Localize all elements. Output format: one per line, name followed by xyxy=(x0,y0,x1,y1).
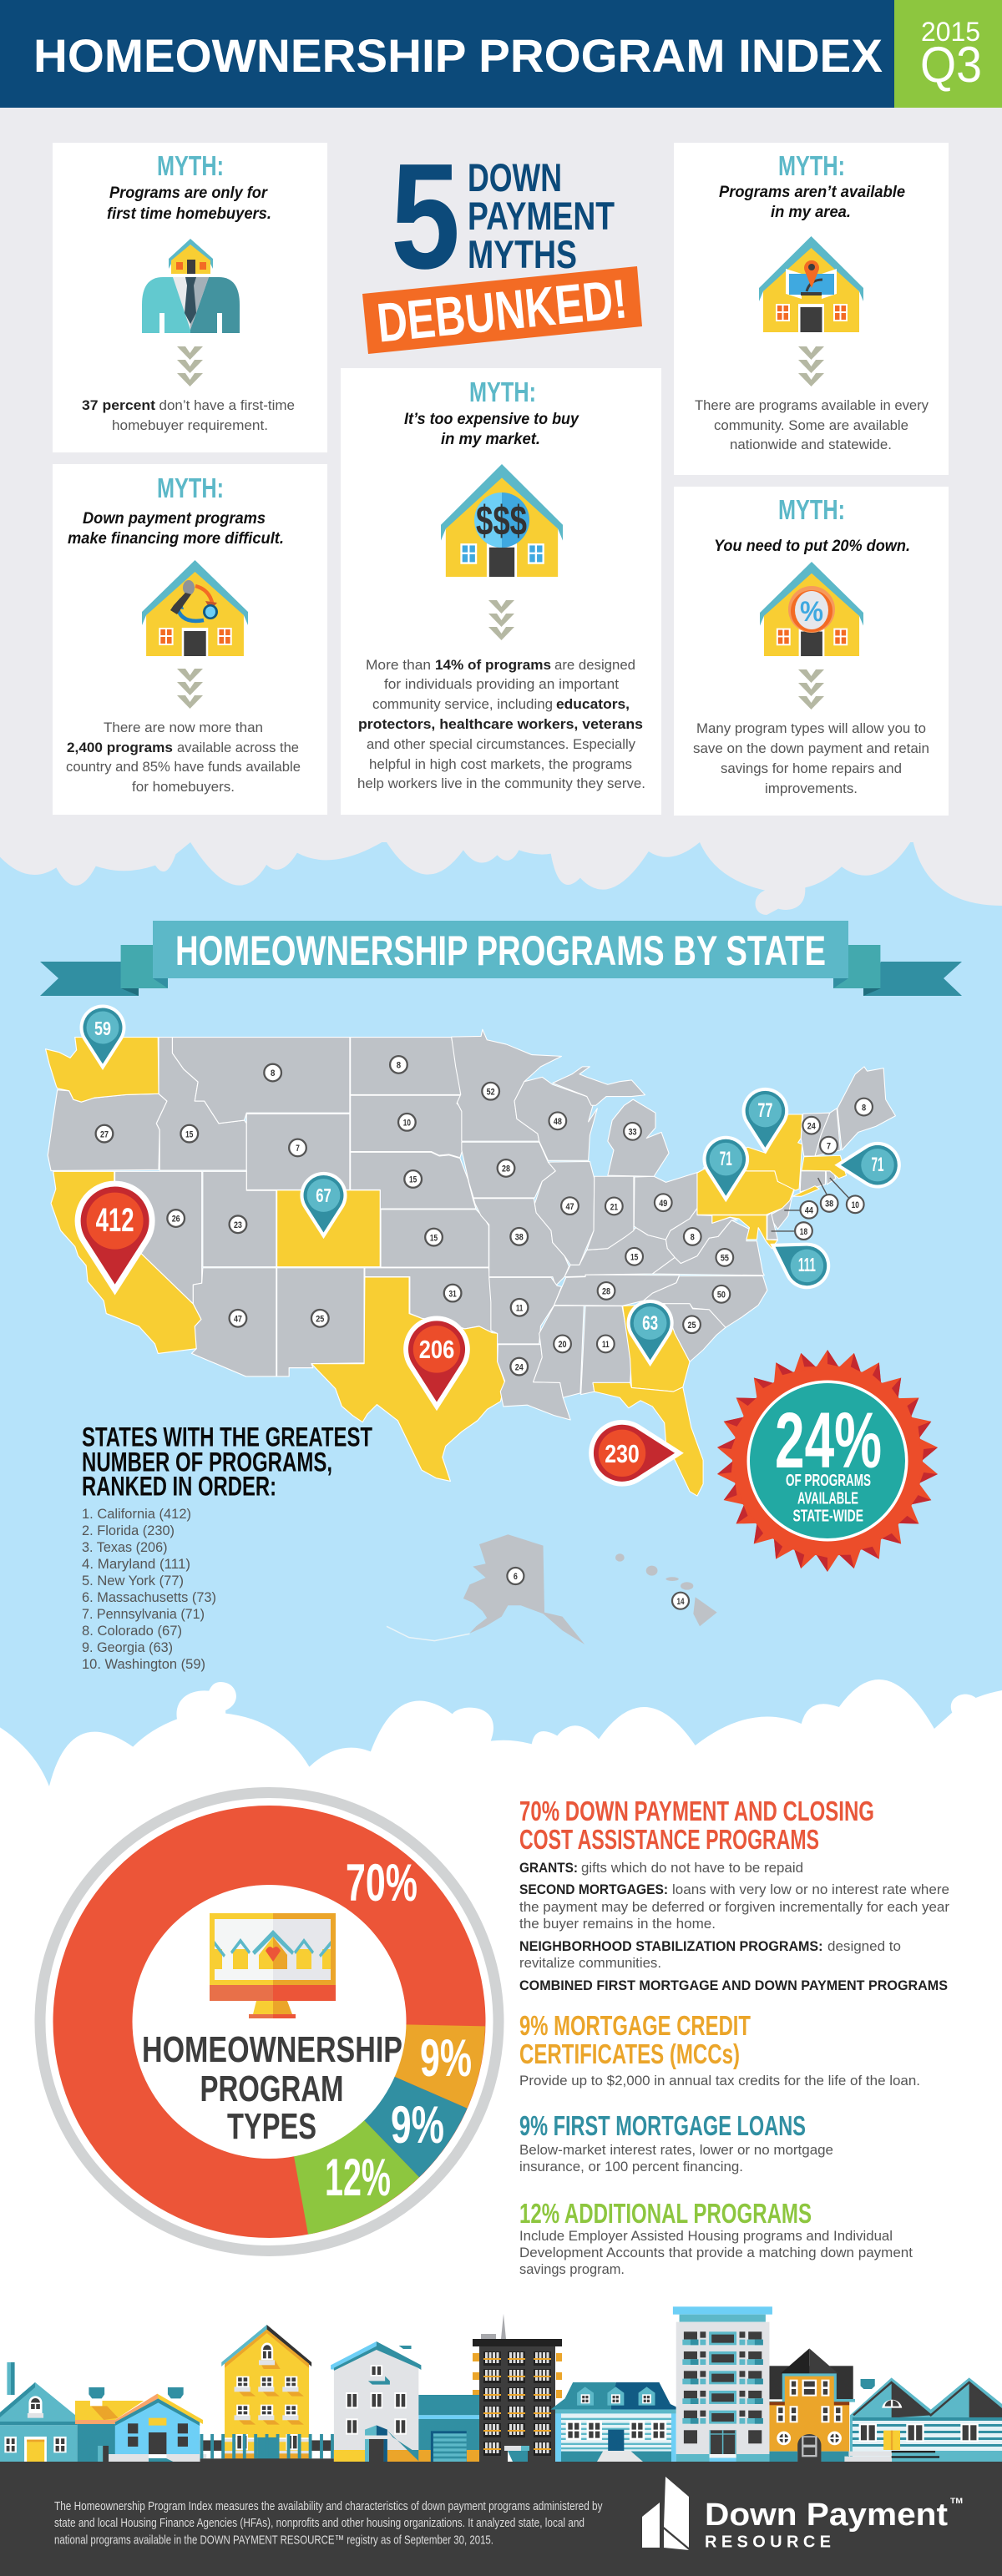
state count badge: Hawaii: 14 xyxy=(676,1597,685,1607)
state count badges west: 31 xyxy=(449,1289,457,1299)
segment: 9% mortgage credit xyxy=(394,2024,485,2109)
value labels: 9% xyxy=(391,2096,444,2154)
pin: Massachusetts 71 xyxy=(834,1142,901,1189)
map of United States xyxy=(46,1004,901,1644)
heading xyxy=(519,2010,751,2069)
state count badges east xyxy=(549,1099,873,1352)
pin: Florida 230: 230 xyxy=(605,1439,640,1468)
state count badges east: 8 xyxy=(691,1233,695,1243)
arrow: chevrons xyxy=(798,669,824,710)
heading words: DOWN xyxy=(468,155,562,200)
ranked states list: 8. Colorado (67) xyxy=(82,1623,182,1639)
panel: myth financing difficulty xyxy=(53,464,327,815)
arrow: chevrons xyxy=(177,669,203,709)
ranked states heading xyxy=(82,1422,372,1502)
program descriptions: revitalize communities. xyxy=(519,1955,661,1971)
donut center title: TYPES xyxy=(227,2106,316,2147)
myth heading: MYTH: xyxy=(157,150,224,181)
pin: Washington 59: 59 xyxy=(94,1018,111,1039)
myth statement xyxy=(68,510,284,548)
header band xyxy=(0,0,1002,108)
ranked states list: 9. Georgia (63) xyxy=(82,1639,173,1655)
state count badges east: 44 xyxy=(805,1206,813,1216)
myth answer xyxy=(693,720,929,796)
myth answer: don’t have a first-time xyxy=(159,397,295,413)
state count badges east: 8 xyxy=(862,1103,866,1113)
myth answer: Many program types will allow you to xyxy=(696,720,926,736)
ranked states list: 5. New York (77) xyxy=(82,1573,184,1589)
myth answer: There are now more than xyxy=(104,720,263,735)
heading: 5 down payment myths debunked xyxy=(362,133,642,354)
ranked states list: 3. Texas (206) xyxy=(82,1539,167,1555)
myth heading: MYTH: xyxy=(778,494,845,525)
myth answer xyxy=(66,720,301,795)
description: Below-market interest rates, lower or no mortgage xyxy=(519,2142,833,2158)
logo: Down Payment Resource: Down Payment xyxy=(705,2498,948,2533)
icon: monitor with houses xyxy=(210,1913,336,2018)
icon: house-headed person xyxy=(142,239,240,333)
ranked states list: 4. Maryland (111) xyxy=(82,1556,190,1572)
state count badges east: 18 xyxy=(800,1227,807,1237)
myth answer xyxy=(695,397,929,452)
houses, left part xyxy=(0,2325,482,2462)
myth answer: for individuals providing an important xyxy=(384,676,619,692)
pin: Texas 206 xyxy=(403,1316,470,1411)
blue map section background xyxy=(0,826,1002,1795)
panel: myth 20% down xyxy=(674,487,949,816)
description xyxy=(519,2228,913,2277)
state count badges west: 47 xyxy=(234,1315,242,1325)
white clouds xyxy=(0,1679,1002,1826)
pin: Colorado 67: 67 xyxy=(316,1184,331,1206)
myth answer: 2,400 programs xyxy=(67,740,173,755)
ranked states list: 1. California (412) xyxy=(82,1506,191,1522)
myth statement xyxy=(404,411,579,448)
pin: Georgia 63: 63 xyxy=(642,1312,658,1335)
icon: house with map xyxy=(759,236,863,332)
icon: house with dollar signs: $$$ xyxy=(476,498,527,544)
text block: 9% first mortgage loans xyxy=(519,2110,833,2174)
panel: myth first-time homebuyers xyxy=(53,143,327,452)
state count badges west: 23 xyxy=(234,1220,242,1230)
description: savings program. xyxy=(519,2261,625,2277)
state count badges east: 38 xyxy=(825,1200,833,1210)
myth answer: save on the down payment and retain xyxy=(693,740,929,756)
myth heading: MYTH: xyxy=(778,150,845,181)
pin: Pennsylvania 71 xyxy=(702,1136,749,1202)
callout number: 24% xyxy=(775,1397,882,1485)
myth answer: for homebuyers. xyxy=(132,779,235,795)
state count badges west: 11 xyxy=(516,1304,524,1314)
state count badges east: 33 xyxy=(628,1128,636,1138)
ranked states list: 10. Washington (59) xyxy=(82,1656,205,1672)
logo: Down Payment Resource xyxy=(642,2477,963,2552)
black tower xyxy=(473,2314,562,2462)
ranked states list: 2. Florida (230) xyxy=(82,1523,175,1538)
myth answer: country and 85% have funds available xyxy=(66,759,301,775)
myth answer: are designed xyxy=(554,657,635,673)
state count badges west: 8 xyxy=(397,1061,402,1071)
myth answer: community service, including xyxy=(372,696,553,712)
program descriptions: GRANTS: xyxy=(519,1860,578,1876)
state count badges west: 8 xyxy=(271,1068,276,1078)
pin: Colorado 67 xyxy=(300,1172,347,1239)
myth answer: There are programs available in every xyxy=(695,397,929,413)
myth answer xyxy=(82,397,295,433)
program descriptions: NEIGHBORHOOD STABILIZATION PROGRAMS: xyxy=(519,1938,823,1954)
date: year: 2015 xyxy=(921,17,980,47)
myth answer: protectors, healthcare workers, veterans xyxy=(358,716,643,732)
state count badges west: 52 xyxy=(487,1087,495,1097)
description: insurance, or 100 percent financing. xyxy=(519,2159,743,2174)
ranked states heading: STATES WITH THE GREATEST xyxy=(82,1422,372,1452)
state count badges west xyxy=(96,1056,528,1375)
state count badges west: 38 xyxy=(515,1233,524,1243)
methodology note: national programs available in the DOWN PAYMENT RESOURCE™ registry as of September 30, 2015. xyxy=(54,2533,493,2548)
state count badges west: 7 xyxy=(296,1144,300,1154)
program descriptions xyxy=(519,1860,949,1993)
value labels xyxy=(325,1854,472,2207)
program descriptions: loans with very low or no interest rate where xyxy=(672,1881,949,1897)
pin: Pennsylvania 71: 71 xyxy=(720,1148,732,1170)
methodology note: The Homeownership Program Index measures the availability and characteristics of down payment programs administered by xyxy=(54,2499,603,2513)
heading: 9% FIRST MORTGAGE LOANS xyxy=(519,2110,806,2141)
myth answer: helpful in high cost markets, the programs xyxy=(369,756,632,772)
date: quarter: Q3 xyxy=(920,37,982,93)
state count badges west: 15 xyxy=(185,1129,194,1139)
program descriptions: SECOND MORTGAGES: xyxy=(519,1881,668,1897)
state count badges west: 25 xyxy=(316,1315,325,1325)
heading: 12% ADDITIONAL PROGRAMS xyxy=(519,2198,812,2229)
state count badge: Alaska: 6 xyxy=(514,1572,518,1582)
state count badges east: 49 xyxy=(659,1199,667,1209)
program descriptions: COMBINED FIRST MORTGAGE AND DOWN PAYMENT PROGRAMS xyxy=(519,1977,948,1993)
state count badges east: 55 xyxy=(721,1254,729,1264)
program descriptions: the payment may be deferred or forgiven incrementally for each year xyxy=(519,1899,949,1915)
description: Development Accounts that provide a matching down payment xyxy=(519,2245,913,2260)
pin: California 412 xyxy=(75,1181,155,1296)
icon: house with percent badge xyxy=(760,562,863,656)
starburst callout: 24% state-wide xyxy=(716,1350,939,1572)
ranked states block xyxy=(82,1422,372,1672)
icon: house with dollar signs xyxy=(441,464,563,577)
heading: 70% DOWN PAYMENT AND CLOSING xyxy=(519,1796,874,1826)
myth answer: improvements. xyxy=(765,780,858,796)
myth answer: savings for home repairs and xyxy=(721,760,902,776)
debunked banner: DEBUNKED! xyxy=(374,267,630,354)
myth answer: community. Some are available xyxy=(714,417,908,433)
description xyxy=(519,2142,833,2174)
myth statement: You need to put 20% down. xyxy=(714,538,910,555)
segment: 9% first mortgage xyxy=(364,2077,468,2177)
pin: Washington 59 xyxy=(79,1004,126,1070)
state count badge: Alaska xyxy=(507,1568,524,1584)
pin: Texas 206: 206 xyxy=(419,1335,454,1364)
myth statement: Programs are only for xyxy=(109,184,269,202)
heading: COST ASSISTANCE PROGRAMS xyxy=(519,1824,819,1855)
myth statement: make financing more difficult. xyxy=(68,530,284,548)
panel: myth not in my area xyxy=(674,143,949,475)
methodology note: state and local Housing Finance Agencies (HFAs), nonprofits and other housing organizations. It analyzed state, local and xyxy=(54,2516,584,2530)
myth answer: educators, xyxy=(556,696,630,712)
state count badges west: 26 xyxy=(172,1215,180,1225)
program descriptions: the buyer remains in the home. xyxy=(519,1916,716,1932)
myth statement: Programs aren’t available xyxy=(719,184,905,201)
state count badges east: 20 xyxy=(559,1340,567,1350)
illustration: neighbourhood skyline xyxy=(0,2306,1002,2462)
state count badges east: 28 xyxy=(602,1287,610,1297)
heading: CERTIFICATES (MCCs) xyxy=(519,2038,740,2069)
text block: 70% down payment and closing cost assistance xyxy=(519,1796,949,1993)
title: HOMEOWNERSHIP PROGRAM INDEX xyxy=(33,29,883,82)
description: Include Employer Assisted Housing programs and Individual xyxy=(519,2228,893,2244)
myth answer: help workers live in the community they serve. xyxy=(357,775,645,791)
segment: 12% additional xyxy=(294,2120,419,2235)
state count badges east: 24 xyxy=(807,1121,816,1131)
myth answer: 14% of programs xyxy=(435,657,551,673)
ranked states list xyxy=(82,1506,216,1672)
value labels: 9% xyxy=(420,2029,472,2088)
myth answer: and other special circumstances. Especially xyxy=(367,736,635,752)
ranked states list: 6. Massachusetts (73) xyxy=(82,1589,216,1605)
methodology note xyxy=(54,2499,603,2548)
heading: 9% MORTGAGE CREDIT xyxy=(519,2010,751,2041)
description: Provide up to $2,000 in annual tax credits for the life of the loan. xyxy=(519,2073,920,2089)
myth statement: first time homebuyers. xyxy=(107,205,271,223)
pin: Florida 230 xyxy=(589,1420,684,1487)
myth answer: homebuyer requirement. xyxy=(112,417,268,433)
arrow: chevrons xyxy=(798,346,824,386)
banner title: HOMEOWNERSHIP PROGRAMS BY STATE xyxy=(175,927,826,974)
state count badges east: 21 xyxy=(610,1202,618,1212)
value labels: 70% xyxy=(346,1854,418,1912)
callout caption: STATE-WIDE xyxy=(793,1508,863,1526)
donut chart: program types xyxy=(40,1793,498,2250)
ranked states heading: RANKED IN ORDER: xyxy=(82,1472,276,1502)
state count badges west: 24 xyxy=(515,1362,524,1372)
numeral 5: 5 xyxy=(391,133,460,301)
icon: house with key and coin xyxy=(142,560,248,656)
callout caption xyxy=(786,1472,871,1526)
state count badges east: 50 xyxy=(717,1291,726,1301)
Alaska xyxy=(387,1534,584,1644)
grey section background xyxy=(0,108,1002,842)
text block: 9% mortgage credit certificates xyxy=(519,2010,920,2089)
myth answer: nationwide and statewide. xyxy=(730,437,892,452)
callout caption: AVAILABLE xyxy=(797,1490,858,1508)
banner: homeownership programs by state xyxy=(40,921,962,996)
myth statement: Down payment programs xyxy=(83,510,266,528)
myth statement: It’s too expensive to buy xyxy=(404,411,579,428)
state count badges west: 28 xyxy=(502,1164,510,1174)
myth heading: MYTH: xyxy=(157,472,224,503)
donut center title: HOMEOWNERSHIP xyxy=(142,2029,402,2070)
logo: Down Payment Resource: TM xyxy=(950,2497,963,2505)
value labels: 12% xyxy=(325,2149,391,2207)
state count badges east: 25 xyxy=(688,1321,696,1331)
state count badges west: 27 xyxy=(100,1129,109,1139)
state count badges west: 15 xyxy=(409,1175,418,1185)
heading words xyxy=(468,155,615,276)
text block: 12% additional programs xyxy=(519,2198,913,2277)
myth statement xyxy=(107,184,271,223)
program descriptions: gifts which do not have to be repaid xyxy=(581,1860,803,1876)
grey clouds xyxy=(0,826,1002,915)
state count badges east: 47 xyxy=(565,1202,574,1212)
arrow: chevrons xyxy=(177,346,203,386)
state count badges east: 7 xyxy=(827,1141,831,1151)
heading xyxy=(519,1796,874,1855)
callout caption: OF PROGRAMS xyxy=(786,1472,871,1490)
myth answer: 37 percent xyxy=(82,397,155,413)
state count badges east: 48 xyxy=(554,1117,562,1127)
pin: Maryland 111: 111 xyxy=(798,1254,816,1275)
program descriptions: designed to xyxy=(827,1938,901,1954)
icon: house with percent badge: % xyxy=(800,596,823,628)
pin: Massachusetts 71: 71 xyxy=(872,1154,883,1176)
pin: Georgia 63 xyxy=(627,1300,674,1366)
footer band xyxy=(0,2462,1002,2576)
pin: Maryland 111 xyxy=(758,1224,839,1298)
pin: California 412: 412 xyxy=(96,1202,134,1239)
state count badges east: 10 xyxy=(852,1200,859,1210)
heading words: MYTHS xyxy=(468,232,577,276)
myth answer xyxy=(357,657,645,791)
logo: Down Payment Resource: RESOURCE xyxy=(705,2533,831,2552)
donut center title xyxy=(142,2029,402,2147)
state count badges east: 11 xyxy=(602,1340,610,1350)
panel: myth too expensive xyxy=(341,368,661,815)
pin: New York 77 xyxy=(742,1088,788,1154)
state count badges east: 15 xyxy=(630,1253,639,1263)
state count badge: Hawaii xyxy=(672,1593,689,1609)
myth heading: MYTH: xyxy=(469,376,536,407)
heading words: PAYMENT xyxy=(468,194,615,238)
state count badges west: 15 xyxy=(430,1233,438,1243)
state count badges west: 10 xyxy=(403,1119,411,1129)
ranked states heading: NUMBER OF PROGRAMS, xyxy=(82,1447,332,1477)
ranked states list: 7. Pennsylvania (71) xyxy=(82,1606,205,1622)
myth answer: available across the xyxy=(177,740,299,755)
myth answer: More than xyxy=(366,657,431,673)
myth statement: in my market. xyxy=(441,431,540,448)
myth statement xyxy=(719,184,905,221)
myth statement: in my area. xyxy=(771,204,851,221)
Hawaii xyxy=(615,1553,717,1626)
houses, right part xyxy=(550,2306,1002,2462)
arrow: chevrons xyxy=(488,600,514,640)
donut center title: PROGRAM xyxy=(200,2068,344,2109)
pin: New York 77: 77 xyxy=(757,1099,772,1122)
